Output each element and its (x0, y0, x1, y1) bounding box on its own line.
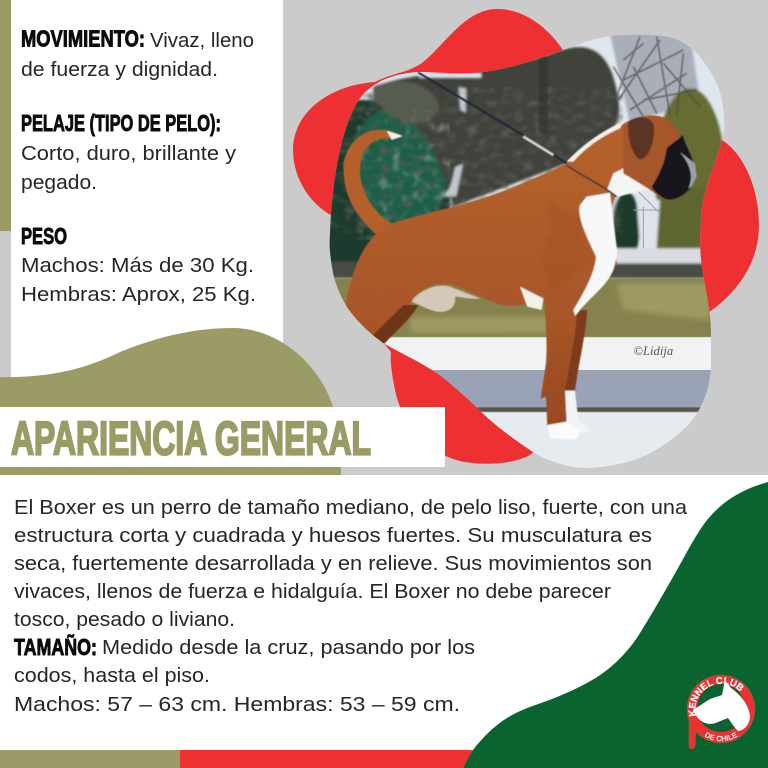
fence lines (633, 190, 660, 248)
text block: description: seca, fuertemente desarrollada y en relieve. Sus movimientos son (14, 553, 652, 575)
text block: peso: PESO (21, 223, 67, 249)
text block: peso: Machos: Más de 30 Kg. (21, 255, 254, 277)
text block: movimiento: MOVIMIENTO: (21, 26, 145, 52)
head (623, 116, 697, 200)
white info panel (11, 0, 283, 380)
text block: movimiento (21, 26, 254, 81)
ear (628, 117, 654, 159)
text block: movimiento: Vivaz, lleno (150, 30, 254, 52)
logo text top: KENNEL CLUB (688, 677, 744, 716)
rear leg dark (372, 305, 418, 345)
photo: boxer dog standing (323, 30, 740, 474)
green corner shape (463, 482, 768, 768)
leash (418, 73, 567, 163)
grey background (0, 0, 768, 475)
text block: tamaño: codos, hasta el piso. (14, 665, 210, 687)
text block: pelaje: PELAJE (TIPO DE PELO): (21, 110, 221, 136)
text block: description: vivaces, llenos de fuerza e hidalguía. El Boxer no debe parecer (14, 581, 611, 603)
collar (567, 165, 617, 197)
bare branches (543, 37, 700, 133)
signature: ©Lidija (633, 344, 673, 358)
text block: description: El Boxer es un perro de tamaño mediano, de pelo liso, fuerte, con una (14, 497, 688, 519)
title band (0, 407, 445, 467)
far leg (565, 310, 587, 392)
text block: peso (21, 223, 256, 306)
front paw (547, 422, 580, 439)
text block: peso: Hembras: Aprox, 25 Kg. (21, 284, 256, 306)
title background (0, 407, 445, 467)
bottom red strip (180, 750, 473, 768)
grass (323, 278, 723, 337)
text block: tamaño: TAMAÑO: (14, 633, 97, 660)
muzzle black (652, 135, 696, 200)
text block: description: tosco, pesado o liviano. (14, 609, 235, 631)
sky patches between trees (417, 73, 482, 197)
title text: APARIENCIA GENERAL (11, 412, 371, 464)
white chest (573, 193, 617, 316)
text block: movimiento: de fuerza y dignidad. (21, 59, 218, 81)
logo ribbon (689, 722, 696, 749)
body (345, 123, 625, 427)
red blob behind photo (293, 9, 759, 464)
white kerb (376, 337, 711, 371)
grey kerb face (432, 370, 711, 410)
text block: tamaño (14, 633, 475, 716)
olive side strip (0, 0, 11, 231)
olive hill shape (0, 328, 341, 475)
logo dog head (693, 680, 750, 731)
text block: pelaje: pegado. (21, 172, 97, 194)
logo text bottom: DE CHILE (704, 732, 738, 742)
text block: tamaño: Machos: 57 – 63 cm. Hembras: 53 – 59 cm. (14, 694, 460, 716)
text block: pelaje (21, 110, 236, 194)
text block: description: estructura corta y cuadrada y huesos fuertes. Su musculatura es (14, 525, 652, 547)
shoulder shading (543, 197, 595, 293)
tail (343, 130, 403, 234)
pavement (480, 410, 698, 468)
text block: pelaje: Corto, duro, brillante y (21, 143, 236, 165)
belly (412, 286, 480, 312)
logo: Kennel Club de Chile (686, 674, 756, 750)
photo scenery (323, 30, 740, 474)
boxer dog (343, 73, 697, 439)
bottom olive strip (0, 750, 180, 768)
white lower background (0, 475, 768, 768)
far paw white (564, 391, 592, 434)
tree texture (323, 87, 623, 240)
text block: tamaño: Medido desde la cruz, pasando por los (102, 637, 475, 659)
text block: description (14, 497, 688, 631)
